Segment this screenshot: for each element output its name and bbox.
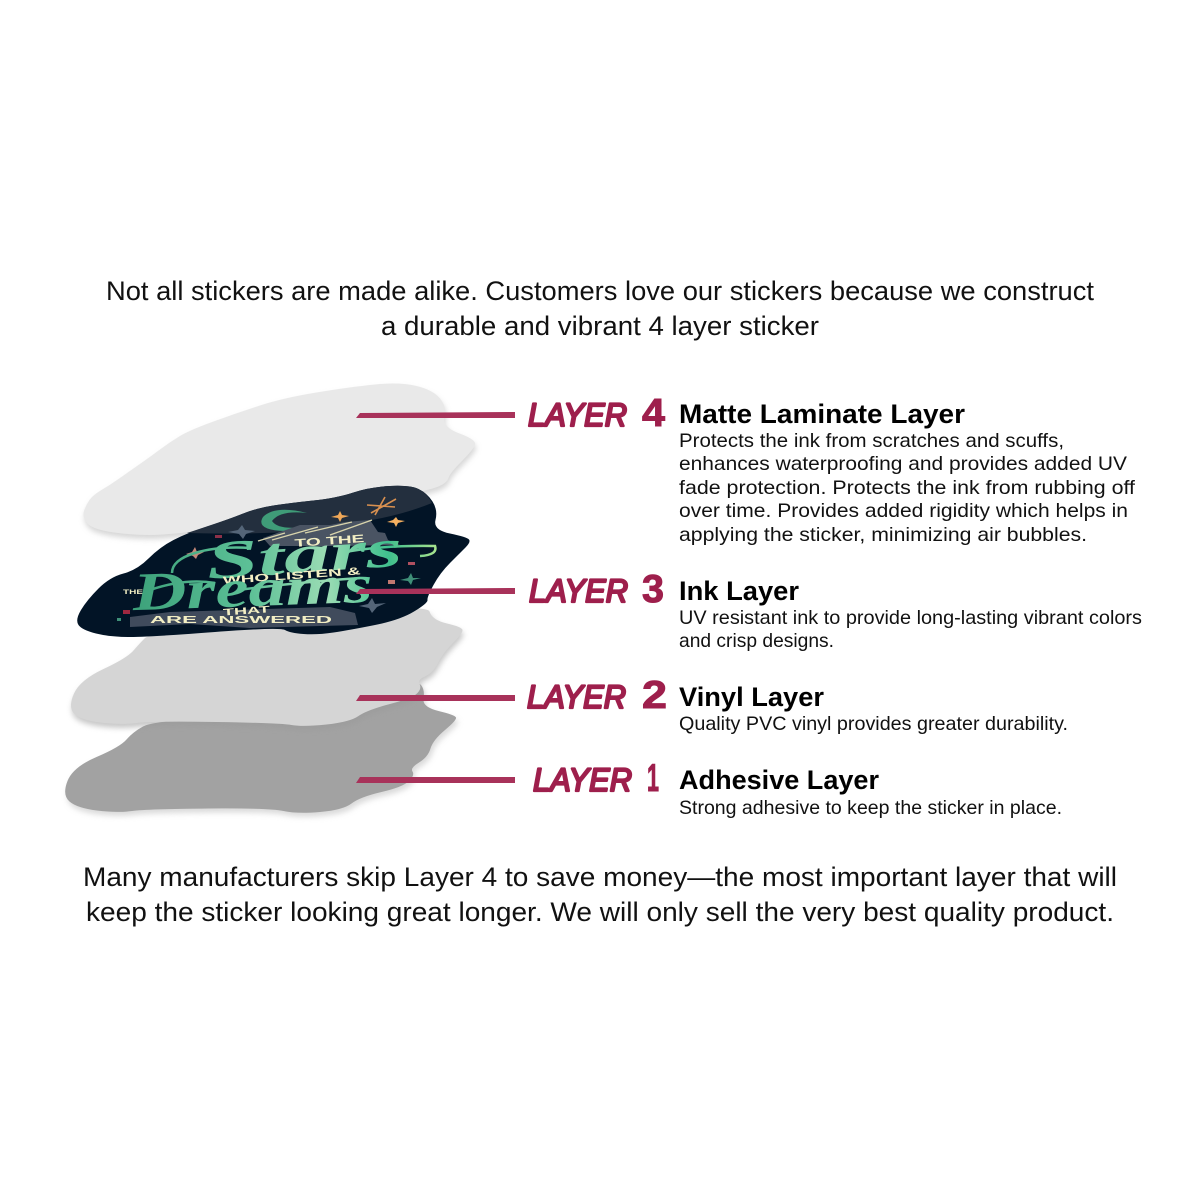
lettering: stars: Stars <box>204 517 404 591</box>
sticker base <box>77 486 470 637</box>
label: layer 1: LAYER <box>533 762 632 798</box>
gloss band <box>187 486 432 534</box>
banner <box>130 607 358 628</box>
text block: adhesive layer: Adhesive Layer <box>679 765 879 795</box>
leader line: layer 1 <box>356 777 515 783</box>
layer 2: vinyl sticker shape <box>71 608 464 730</box>
lettering: that: THAT <box>223 604 271 619</box>
label: layer 3: 3 <box>642 568 664 611</box>
label: layer 1: 1 <box>647 757 659 800</box>
intro text: Not all stickers are made alike. Customers love our stickers because we construct <box>106 276 1094 306</box>
text block: vinyl layer <box>679 682 1068 735</box>
label: layer 4: LAYER <box>528 397 627 433</box>
text block: matte laminate layer <box>679 399 1136 546</box>
text block: ink layer: Ink Layer <box>679 576 799 606</box>
text block: matte laminate layer: enhances waterproofing and provides added UV <box>679 453 1127 475</box>
closing text: Many manufacturers skip Layer 4 to save money—the most important layer that will <box>83 862 1117 892</box>
label: layer 4 <box>528 392 665 435</box>
stars <box>117 497 421 621</box>
intro text <box>106 276 1094 341</box>
label: layer 3: LAYER <box>529 573 628 609</box>
text block: ink layer: UV resistant ink to provide long-lasting vibrant colors <box>679 607 1142 629</box>
streak marks <box>258 520 372 541</box>
label: layer 4: 4 <box>642 392 665 435</box>
closing text: keep the sticker looking great longer. We will only sell the very best quality product. <box>86 897 1114 927</box>
lettering: to the: TO THE <box>294 533 365 550</box>
leader line: layer 2 <box>356 695 515 701</box>
label: layer 2: 2 <box>642 674 667 717</box>
banner text: ARE ANSWERED <box>150 615 332 626</box>
label: layer 1 <box>533 757 659 800</box>
label: layer 2: LAYER <box>527 679 626 715</box>
lettering: who listen: WHO LISTEN & <box>223 565 362 587</box>
text block: matte laminate layer: over time. Provides added rigidity which helps in <box>679 500 1128 522</box>
label: layer 3 <box>529 568 664 611</box>
text block: adhesive layer: Strong adhesive to keep the sticker in place. <box>679 797 1062 819</box>
text block: vinyl layer: Vinyl Layer <box>679 682 824 712</box>
layer 3: ink sticker with printed design <box>77 486 470 637</box>
layer 1: adhesive sticker shape <box>65 684 458 817</box>
text block: adhesive layer <box>679 765 1062 819</box>
text block: matte laminate layer: Protects the ink from scratches and scuffs, <box>679 430 1064 452</box>
layer 4: matte laminate sticker shape <box>83 384 476 539</box>
leader line: layer 4 <box>356 412 515 418</box>
intro text: a durable and vibrant 4 layer sticker <box>381 311 819 341</box>
lettering: the: THE <box>123 589 144 596</box>
text block: matte laminate layer: applying the sticker, minimizing air bubbles. <box>679 524 1087 546</box>
text block: matte laminate layer: Matte Laminate Layer <box>679 399 965 429</box>
text block: ink layer: and crisp designs. <box>679 630 834 652</box>
text block: matte laminate layer: fade protection. Protects the ink from rubbing off <box>679 477 1136 499</box>
moon icon <box>261 510 307 531</box>
label: layer 2 <box>527 674 667 717</box>
text block: ink layer <box>679 576 1142 652</box>
closing text <box>83 862 1117 927</box>
lettering: dreams: Dreams <box>130 554 374 622</box>
castle spires <box>263 520 400 546</box>
text block: vinyl layer: Quality PVC vinyl provides greater durability. <box>679 713 1068 735</box>
leader line: layer 3 <box>356 588 515 594</box>
swashes <box>150 546 435 590</box>
